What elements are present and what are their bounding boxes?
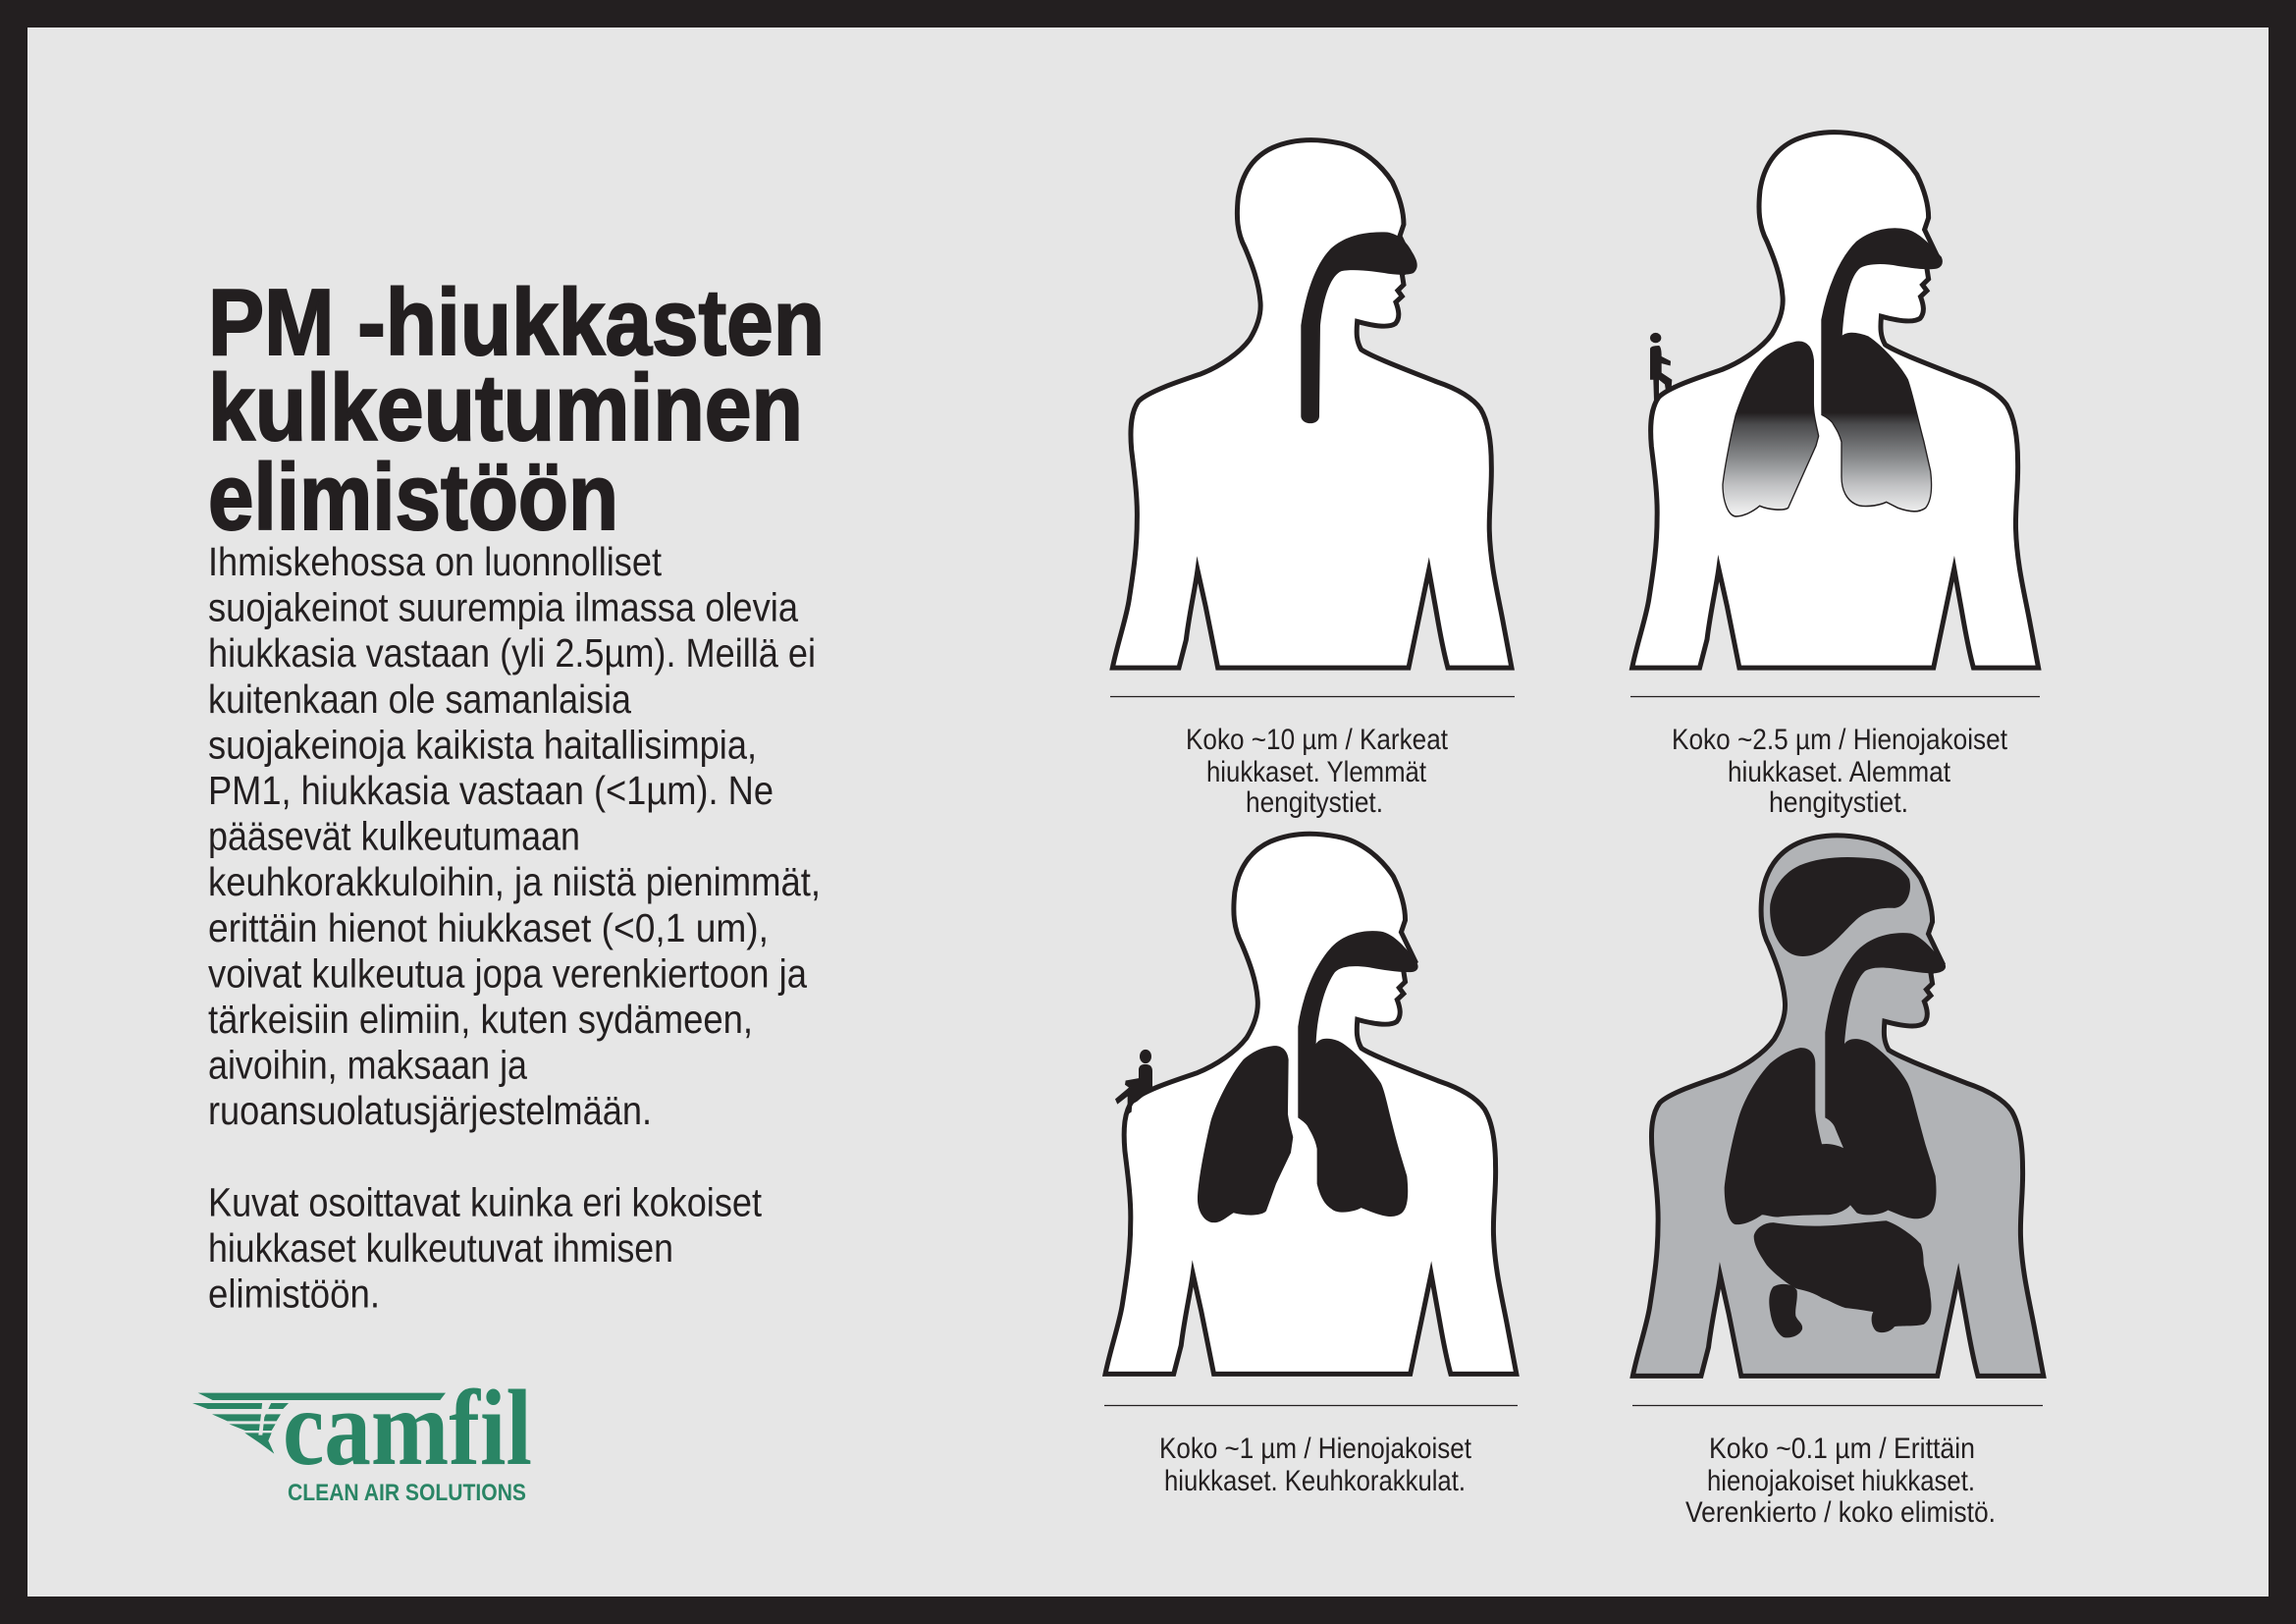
- title: kulkeutuminen: [208, 355, 803, 460]
- right lung and airway: [1822, 229, 1942, 512]
- divider and caption: hengitystiet.: [1769, 786, 1908, 819]
- title: elimistöön: [208, 445, 618, 550]
- panel: alveoli, about 1 µm: [1104, 834, 1518, 1497]
- body text: keuhkorakkuloihin, ja niistä pienimmät,: [208, 859, 821, 904]
- body text: suojakeinoja kaikista haitallisimpia,: [208, 722, 757, 767]
- airway and lungs: [1198, 931, 1418, 1222]
- body outline: [1632, 836, 2044, 1376]
- logo wing stripes: [192, 1393, 446, 1454]
- body text: hiukkasia vastaan (yli 2.5µm). Meillä ei: [208, 630, 816, 676]
- brain: [1770, 857, 1910, 956]
- body text: PM1, hiukkasia vastaan (<1µm). Ne: [208, 768, 774, 813]
- lower organ: [1769, 1284, 1802, 1337]
- left lung: [1723, 342, 1819, 516]
- title: [208, 270, 825, 550]
- logo: camfil: [192, 1368, 532, 1506]
- body text: pääsevät kulkeutumaan: [208, 814, 580, 859]
- panel: upper airways, about 10 µm: [1110, 140, 1515, 819]
- left lung: [1198, 1046, 1293, 1222]
- body text: erittäin hienot hiukkaset (<0,1 um),: [208, 905, 769, 950]
- logo wordmark: camfil: [283, 1368, 532, 1488]
- divider and caption: [1104, 1406, 1518, 1497]
- divider and caption: Koko ~1 µm / Hienojakoiset: [1159, 1433, 1472, 1465]
- body text: elimistöön.: [208, 1272, 380, 1317]
- divider and caption: hiukkaset. Ylemmät: [1206, 756, 1427, 788]
- body text: voivat kulkeutua jopa verenkiertoon ja: [208, 950, 807, 996]
- panel: lower airways, about 2.5 µm: [1630, 133, 2040, 819]
- body text: [208, 539, 821, 1317]
- organs: [1725, 857, 1946, 1337]
- airway and lungs with fading gradient: [1723, 229, 1942, 516]
- divider and caption: hengitystiet.: [1246, 786, 1383, 819]
- divider and caption: hiukkaset. Alemmat: [1728, 756, 1951, 788]
- divider and caption: hiukkaset. Keuhkorakkulat.: [1164, 1465, 1466, 1497]
- body text: suojakeinot suurempia ilmassa olevia: [208, 585, 798, 630]
- body text: Kuvat osoittavat kuinka eri kokoiset: [208, 1179, 763, 1224]
- liver and intestines: [1754, 1220, 1932, 1332]
- body text: aivoihin, maksaan ja: [208, 1043, 527, 1088]
- divider and caption: Koko ~0.1 µm / Erittäin: [1709, 1433, 1975, 1465]
- body outline: [1632, 133, 2039, 668]
- icon: small sitting person: [1115, 1050, 1152, 1114]
- panel: whole body, about 0.1 µm: [1632, 836, 2044, 1529]
- airway: [1301, 232, 1417, 423]
- body text: hiukkaset kulkeutuvat ihmisen: [208, 1225, 673, 1271]
- divider and caption: hienojakoiset hiukkaset.: [1707, 1465, 1975, 1497]
- title: PM -hiukkasten: [208, 270, 825, 375]
- airway, lungs and heart: [1725, 933, 1946, 1224]
- body outline: [1105, 834, 1517, 1374]
- body outline: [1112, 140, 1512, 668]
- right lung and airway: [1298, 931, 1418, 1217]
- divider and caption: [1630, 697, 2040, 819]
- body text: tärkeisiin elimiin, kuten sydämeen,: [208, 997, 753, 1042]
- divider and caption: Verenkierto / koko elimistö.: [1685, 1496, 1996, 1529]
- divider and caption: Koko ~2.5 µm / Hienojakoiset: [1672, 724, 2008, 756]
- divider and caption: Koko ~10 µm / Karkeat: [1186, 724, 1449, 756]
- body text: Ihmiskehossa on luonnolliset: [208, 539, 663, 584]
- divider and caption: [1632, 1406, 2043, 1529]
- logo tagline: CLEAN AIR SOLUTIONS: [288, 1480, 526, 1506]
- body text: ruoansuolatusjärjestelmään.: [208, 1088, 652, 1133]
- divider and caption: [1110, 697, 1515, 819]
- icon: small walking person: [1650, 333, 1672, 402]
- body text: kuitenkaan ole samanlaisia: [208, 677, 631, 722]
